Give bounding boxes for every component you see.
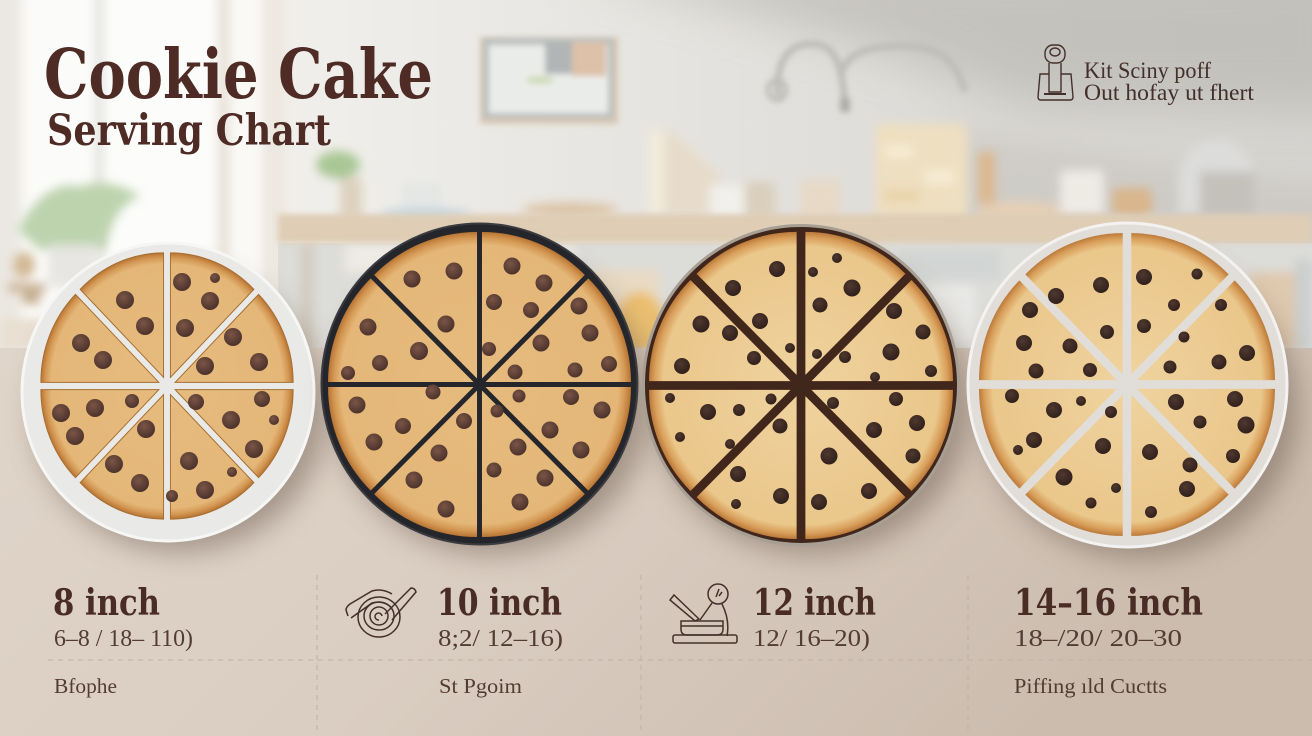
dark pan xyxy=(322,224,638,544)
cut slices xyxy=(979,233,1275,536)
panel: 8 inch cookie on white plate xyxy=(22,243,326,552)
background: plant and pots xyxy=(8,151,618,304)
size heading: 8 inch xyxy=(53,582,160,624)
background: shelf and cabinets xyxy=(0,214,1312,352)
column: 10 inch xyxy=(437,582,563,698)
panel: 12 inch cookie in silver pan xyxy=(644,226,970,554)
chocolate chips xyxy=(1005,268,1255,518)
top right note xyxy=(1084,58,1255,105)
top right note: Kit Sciny poff xyxy=(1084,58,1211,83)
icon: bowl and mixing tool xyxy=(670,584,737,643)
white plate xyxy=(22,243,314,541)
column: 8 inch xyxy=(53,582,193,698)
size heading: 10 inch xyxy=(437,582,562,624)
subtitle: Serving Chart xyxy=(47,106,331,156)
cut slices xyxy=(328,232,631,537)
plate shadow xyxy=(982,258,1298,558)
column: 14-16 inch xyxy=(1014,582,1203,698)
chocolate chips xyxy=(52,273,279,502)
background: window and curtains xyxy=(0,0,286,360)
background: jars, boards and kettle xyxy=(645,124,1254,223)
chocolate chips xyxy=(665,253,937,510)
table dividers xyxy=(48,575,1312,730)
size heading: 14–16 inch xyxy=(1014,582,1203,624)
pan shadow xyxy=(334,254,650,554)
cut slices xyxy=(41,253,293,519)
plate shadow xyxy=(34,272,326,552)
servings: 6–8 / 18– 110) xyxy=(54,626,193,652)
servings: 18–/20/ 20–30 xyxy=(1014,626,1182,652)
panel: 14-16 inch cookie on white plate xyxy=(968,223,1298,558)
column: 12 inch xyxy=(753,582,876,652)
servings: 12/ 16–20) xyxy=(753,626,870,652)
title: Cookie Cake xyxy=(44,35,433,115)
icon: rolled spiral xyxy=(346,588,416,637)
top right note: Out hofay ut fhert xyxy=(1084,80,1255,105)
servings: 8;2/ 12–16) xyxy=(438,626,563,652)
icon: stand mixer xyxy=(1038,45,1073,100)
background: blurred kitchen wall xyxy=(0,0,1312,350)
pan shadow xyxy=(654,258,970,554)
title block xyxy=(44,35,433,156)
cut slices xyxy=(649,232,953,539)
panel: 10 inch cookie in dark pan xyxy=(322,224,650,554)
note: Piffing ıld Cuctts xyxy=(1014,674,1167,698)
white plate xyxy=(968,223,1287,547)
note: St Pgoim xyxy=(439,674,522,698)
chocolate chips xyxy=(341,258,617,518)
background: wall faucet rail xyxy=(768,44,965,112)
size heading: 12 inch xyxy=(753,582,876,624)
counter surface xyxy=(0,348,1312,736)
silver pan xyxy=(644,226,958,544)
note: Bfophe xyxy=(54,674,117,698)
background: wall picture frame xyxy=(480,37,618,124)
